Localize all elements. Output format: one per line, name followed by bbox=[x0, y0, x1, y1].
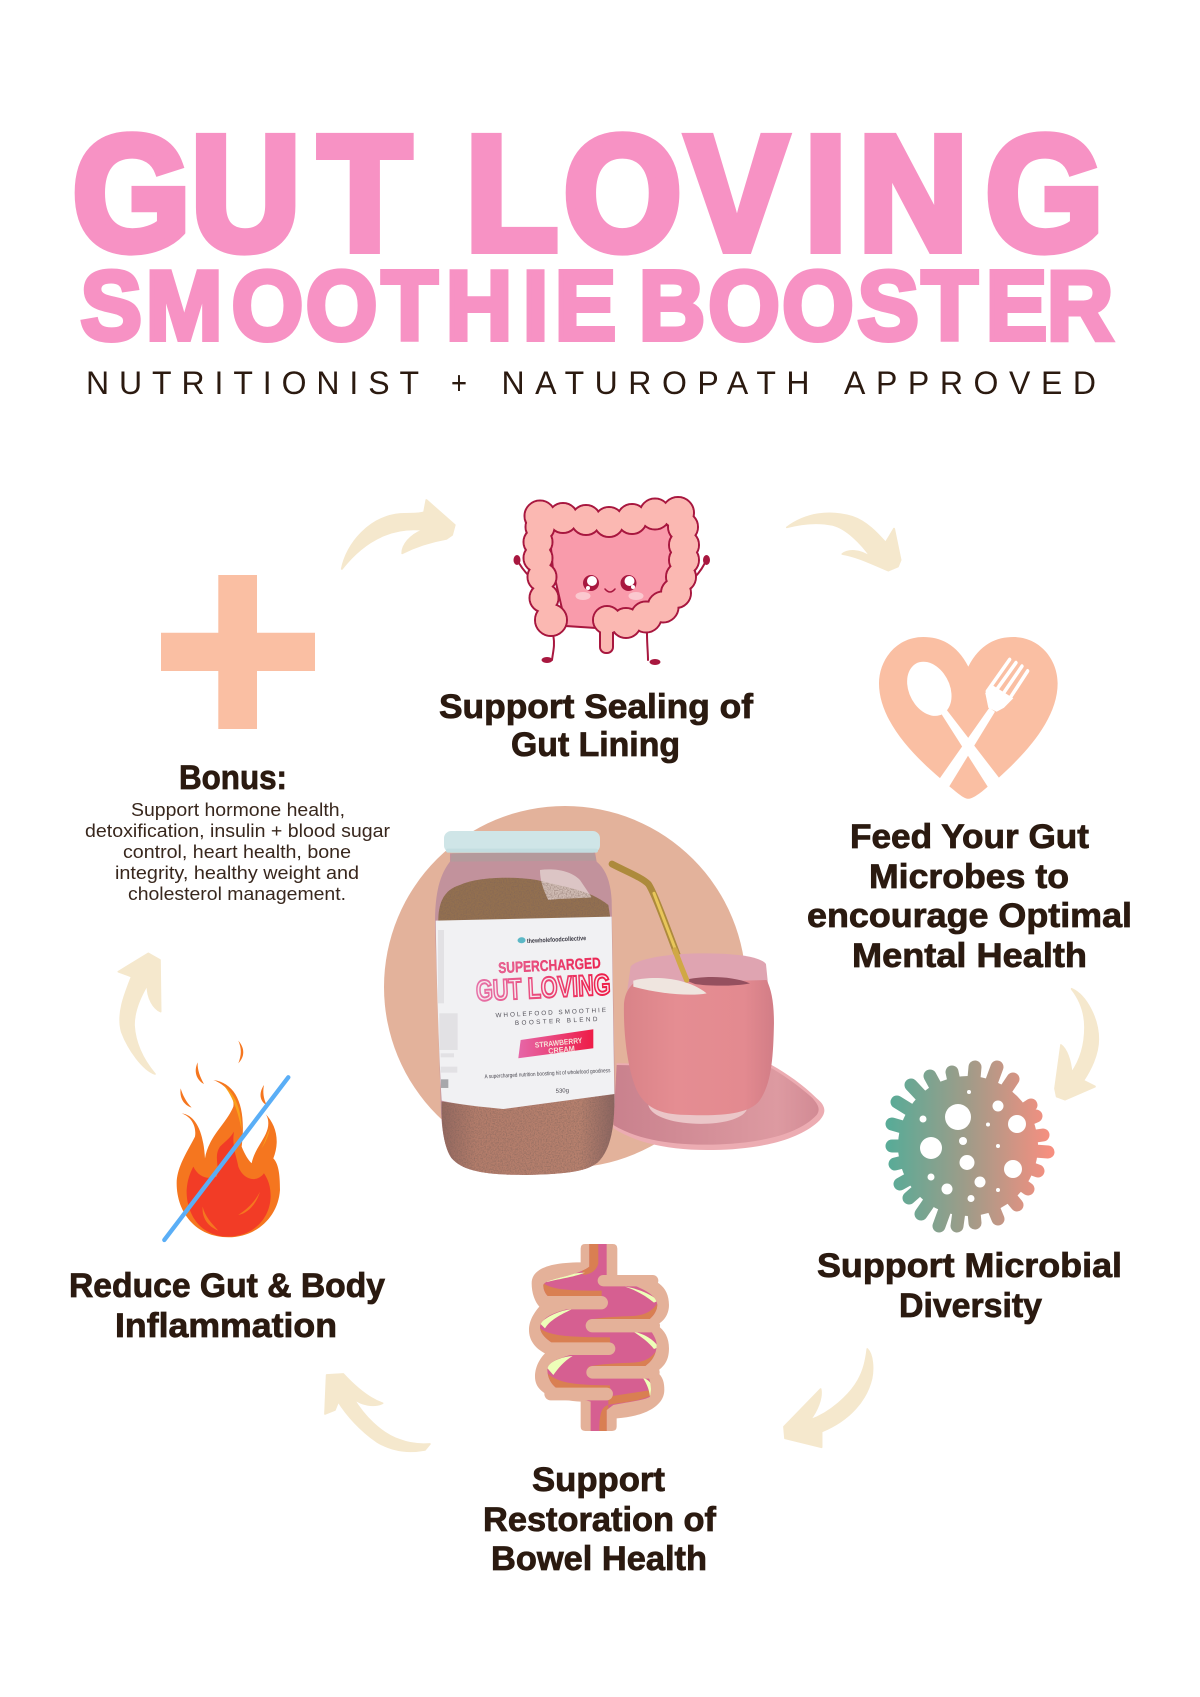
label: support sealing: Support Sealing of bbox=[439, 688, 754, 726]
product illustration bbox=[384, 806, 824, 1177]
bonus heading: Bonus: bbox=[179, 759, 287, 797]
background circle bbox=[384, 806, 746, 1168]
jar label: A supercharged nutrition boosting hit of wholefood goodness bbox=[484, 1068, 611, 1080]
bonus text: Support hormone health, bbox=[131, 799, 345, 820]
plate bbox=[613, 1063, 824, 1150]
label: support restoration of bowel health: Bowel Health bbox=[491, 1540, 707, 1578]
label: reduce inflammation: Reduce Gut & Body bbox=[69, 1267, 385, 1305]
jar label bbox=[436, 917, 614, 1109]
arrow: bonus to gut lining bbox=[342, 500, 455, 569]
arrow: inflammation to bonus bbox=[118, 953, 161, 1074]
icon: flame crossed out bbox=[164, 1041, 288, 1240]
arrow: microbes to diversity bbox=[1055, 989, 1098, 1100]
title line: GUT LOVING: GUT bbox=[73, 103, 411, 285]
title line: SMOOTHIE BOOSTER bbox=[81, 252, 1113, 361]
label: reduce inflammation: Inflammation bbox=[115, 1307, 337, 1345]
label: support sealing: Gut Lining bbox=[511, 726, 680, 764]
label: support restoration of bowel health bbox=[483, 1461, 717, 1578]
jar bbox=[433, 831, 617, 1177]
label: support microbial diversity: Support Microbial bbox=[817, 1247, 1122, 1285]
icon: heart with spoon and fork bbox=[879, 637, 1058, 799]
straw bbox=[612, 864, 687, 980]
label: feed your gut microbes: Feed Your Gut bbox=[850, 818, 1089, 856]
jar label: GUT LOVING bbox=[475, 968, 611, 1008]
title bbox=[73, 103, 1113, 361]
label: support restoration of bowel health: Support bbox=[532, 1461, 665, 1499]
title line: SMOOTHIE BOOSTER: BOOSTER bbox=[639, 252, 1113, 361]
label: feed your gut microbes bbox=[807, 818, 1132, 975]
jar label: CREAM bbox=[548, 1044, 575, 1056]
label: reduce inflammation bbox=[69, 1267, 385, 1345]
title line: GUT LOVING: LOVING bbox=[465, 103, 1104, 285]
jar label: WHOLEFOOD SMOOTHIE bbox=[495, 1007, 606, 1019]
jar label: thewholefoodcollective bbox=[527, 935, 587, 945]
bonus text: cholesterol management. bbox=[128, 883, 346, 904]
icon: microbe bbox=[892, 1067, 1048, 1226]
icon: small intestine bbox=[529, 1244, 669, 1431]
icon: happy colon bbox=[514, 497, 710, 665]
bonus text: control, heart health, bone bbox=[123, 841, 351, 862]
bonus text: integrity, healthy weight and bbox=[115, 862, 359, 883]
jar label: 530g bbox=[556, 1088, 569, 1095]
label: support microbial diversity: Diversity bbox=[899, 1287, 1042, 1325]
title line: GUT LOVING bbox=[73, 103, 1104, 285]
label: feed your gut microbes: Mental Health bbox=[852, 937, 1087, 975]
label: feed your gut microbes: encourage Optimal bbox=[807, 897, 1132, 935]
subtitle bbox=[86, 365, 1096, 401]
subtitle: NUTRITIONIST bbox=[86, 365, 419, 401]
label: support restoration of bowel health: Restoration of bbox=[483, 1501, 717, 1539]
bonus text: detoxification, insulin + blood sugar bbox=[85, 820, 390, 841]
arrow: gut lining to microbes bbox=[787, 513, 901, 571]
jar label: SUPERCHARGED bbox=[498, 955, 601, 977]
bonus text bbox=[85, 799, 390, 904]
jar label: BOOSTER BLEND bbox=[515, 1016, 598, 1027]
label: support sealing bbox=[439, 688, 754, 764]
jar lid bbox=[444, 831, 600, 853]
subtitle: + bbox=[451, 365, 467, 401]
label: feed your gut microbes: Microbes to bbox=[869, 858, 1069, 896]
subtitle: NATUROPATH bbox=[502, 365, 810, 401]
label: support microbial diversity bbox=[817, 1247, 1122, 1325]
icon: plus bbox=[161, 575, 315, 729]
arrow: bowel to inflammation bbox=[325, 1374, 430, 1451]
jar label: STRAWBERRY bbox=[534, 1036, 583, 1050]
subtitle: APPROVED bbox=[844, 365, 1096, 401]
smoothie glass bbox=[624, 950, 774, 1124]
arrow: diversity to bowel bbox=[784, 1349, 873, 1447]
title line: SMOOTHIE BOOSTER: SMOOTHIE bbox=[81, 252, 616, 361]
